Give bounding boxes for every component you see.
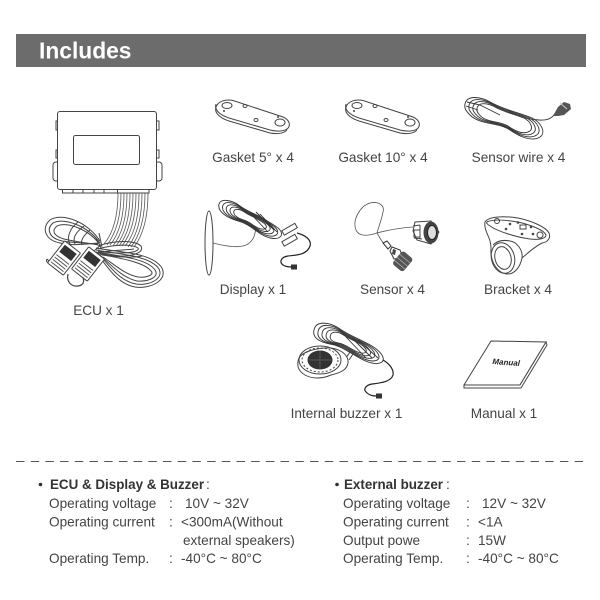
dashed divider bbox=[16, 460, 586, 462]
item: Internal buzzer bbox=[291, 323, 402, 421]
label: Gasket 5° x 4 bbox=[212, 150, 294, 165]
item: Manual bbox=[464, 341, 547, 421]
spec: ECU & Display & Buzzer: Operating voltage bbox=[49, 496, 156, 511]
spec: External buzzer: 12V ~ 32V bbox=[482, 496, 546, 511]
icon: ECU wiring loom bbox=[45, 193, 163, 287]
label: Sensor x 4 bbox=[360, 282, 425, 297]
spec: ECU & Display & Buzzer: Operating current bbox=[49, 514, 155, 530]
label: Bracket x 4 bbox=[484, 282, 552, 297]
label: Manual x 1 bbox=[471, 406, 537, 421]
spec: ECU & Display & Buzzer: external speakers) bbox=[183, 533, 295, 548]
icon: ECU box bbox=[53, 112, 162, 193]
spec: External buzzer: External buzzer bbox=[344, 477, 444, 492]
title: Includes bbox=[39, 38, 131, 64]
spec: External buzzer: 15W bbox=[478, 533, 506, 548]
spec: ECU & Display & Buzzer: : bbox=[206, 477, 210, 492]
item: Gasket 5 bbox=[212, 100, 294, 165]
spec: External buzzer: Operating Temp. bbox=[343, 551, 443, 566]
icon: coiled sensor wire bbox=[465, 98, 571, 139]
spec: External buzzer: <1A bbox=[478, 514, 503, 530]
spec: External buzzer: : bbox=[466, 551, 470, 566]
header bar bbox=[16, 34, 586, 67]
spec: External buzzer: -40°C ~ 80°C bbox=[478, 551, 559, 566]
spec: External buzzer: : bbox=[466, 514, 470, 530]
spec: External buzzer: : bbox=[446, 477, 450, 492]
item: Sensor wire bbox=[465, 98, 571, 165]
item: Bracket bbox=[484, 217, 552, 297]
spec: ECU & Display & Buzzer: : bbox=[169, 496, 173, 511]
icon: parking sensor bbox=[355, 202, 439, 272]
spec: ECU & Display & Buzzer: Operating Temp. bbox=[49, 551, 149, 566]
spec: ECU & Display & Buzzer: ECU & Display & Buzzer bbox=[50, 477, 205, 492]
spec: External buzzer: : bbox=[466, 496, 470, 511]
label: ECU x 1 bbox=[73, 303, 124, 318]
spec: ECU & Display & Buzzer bbox=[39, 477, 295, 566]
spec: External buzzer bbox=[335, 477, 559, 566]
spec: ECU & Display & Buzzer: : bbox=[169, 551, 173, 566]
icon: gasket bbox=[216, 100, 289, 134]
icon: display wire bbox=[205, 200, 310, 275]
spec: External buzzer: Operating current bbox=[343, 514, 449, 530]
spec: External buzzer: Output powe bbox=[343, 533, 420, 548]
spec: ECU & Display & Buzzer: <300mA(Without bbox=[181, 514, 283, 530]
label: Gasket 10° x 4 bbox=[338, 150, 428, 165]
spec: ECU & Display & Buzzer: 10V ~ 32V bbox=[185, 496, 249, 511]
item: Display bbox=[205, 200, 310, 297]
icon: gasket bbox=[346, 100, 419, 134]
spec: ECU & Display & Buzzer: -40°C ~ 80°C bbox=[181, 551, 262, 566]
spec: ECU & Display & Buzzer: : bbox=[169, 514, 173, 530]
item: ECU bbox=[45, 112, 163, 318]
label: Internal buzzer x 1 bbox=[291, 406, 402, 421]
spec: External buzzer: Operating voltage bbox=[343, 496, 450, 511]
label: Display x 1 bbox=[220, 282, 286, 297]
item: Gasket 10 bbox=[338, 100, 428, 165]
icon: buzzer bbox=[298, 323, 393, 398]
icon: sensor bracket bbox=[485, 217, 550, 276]
spec: External buzzer: : bbox=[466, 533, 470, 548]
label: Sensor wire x 4 bbox=[472, 150, 566, 165]
icon: manual booklet: Manual bbox=[492, 357, 521, 368]
item: Sensor bbox=[355, 202, 439, 297]
